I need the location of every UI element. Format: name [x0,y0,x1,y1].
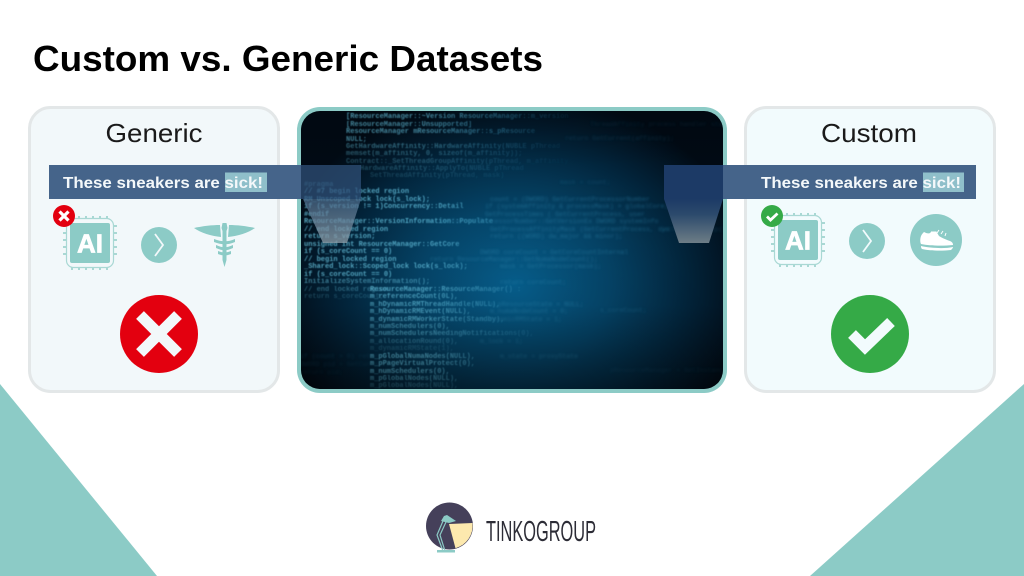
sentence text: These sneakers are sick! [63,175,263,192]
icon: green check badge [761,205,783,227]
panel: code image: m_pGlobalNodes(NULL), [370,375,458,383]
panel: code image: DWORD coreCount = GetCoreCountInternal [480,249,628,256]
panel: code image: #pragma [304,181,334,189]
panel: code image: memset(m_affinity, 0, sizeof(m_affinity)); [346,150,522,158]
panel: code image: return ResourceManager::GetNumaNodeCount(); [430,256,598,263]
panel: code image: if (s_version != 1)Concurrency::Detail [304,203,464,211]
panel: code image: m_hDynamicRMEvent(NULL), [370,308,471,316]
panel: code image: DWORD pid = GetCurrent(); [300,361,398,368]
panel: code image: m_state = proxyState [500,353,578,360]
panel: code image: // begin locked region [304,256,396,264]
panel: code image: unsigned int ResourceManager::GetCore [304,241,459,249]
panel: code image: GetProcessAffinityMask (GetCurrentProcess, sys [490,226,670,233]
panel: code image: SetThreadAffinity(pThread, mask) [370,172,504,180]
word highlight [225,172,267,192]
panel heading: Generic: Generic [106,118,202,148]
panel: code image: m_pGlobalNodes(NULL), [370,382,458,390]
panel: code image: m_allocationRound(0), [370,338,458,346]
panel: code image: // end locked region [304,286,388,294]
panel: code image: count = (DWORD) GetCurrentProcessorNumber [490,196,650,203]
panel: code image: ResourceManager mResourceManager::s_pResource [346,128,535,136]
panel: code image: m_lock = 1; [480,338,523,345]
projector beam left [303,199,361,243]
panel: code image: // #7 begin locked region [304,188,409,196]
panel: code image: GetProcessTimes ( GetCurrentProcess, user [485,211,645,218]
icon: arrow custom [849,223,885,259]
panel: code image: RM_Unscoped_lock lock(s_lock); [304,196,430,204]
panel: code image: #endif [304,211,329,219]
panel: code image: _Shared_lock::Scoped_lock lock(s_lock); [303,263,468,271]
panel: code image: m_numSchedulers(0), [370,323,450,331]
panel: code image: [ResourceManager::Unsupported] [346,121,472,129]
panel: code image: if (s_coreCount == 0) [304,271,392,279]
panel: code image [297,107,739,393]
panel: code image: return s_version; [304,233,375,241]
panel: code image: [ResourceManager::~Version ResourceManager::m_version [346,113,569,121]
panel: code image: m_dynamicRMWorkerState(Standby), [370,316,504,324]
icon: sneaker [910,214,962,266]
icon: AI chip custom: AI [785,226,811,256]
sentence bar left [49,165,361,199]
panel: code image: GetHardwareAffinity::HardwareAffinity(NUBLE pThread [346,143,560,151]
icon: arrow generic [141,227,177,263]
panel: code image: return GetCurrent(affinity); [565,135,674,142]
panel: code image: return ((WORD) dw_major && minor); [490,233,623,240]
icon: large red cross [120,295,198,373]
panel heading: Custom: Custom [821,118,917,148]
icon: AI chip generic: AI [77,228,103,258]
panel: code image: ResourceManager::ResourceManager() : [370,286,521,294]
panel: code image: m_dynamicRMState(1), [370,345,454,353]
icon: AI chip custom [771,213,825,267]
panel: code image: ResourceManager::VersionInformation::Populate [304,218,493,226]
panel: code image: HardwareAffinity::ApplyTo(NUBLE pThread [360,165,524,173]
panel: code image: m_hDynamicRMThreadHandle(NULL), [370,301,500,309]
projector beam right [664,199,723,243]
logo mark lamp [426,502,473,552]
panel: code image: GetCurrentProcessorNumber::GetVersionEx DWORD systemInfo [440,218,659,225]
panel: code image: m_pGlobalNumaNodes(NULL), [370,353,475,361]
icon: caduceus [194,223,255,267]
logo wordmark: TINKOGROUP [486,516,596,548]
sentence text: These sneakers are sick! [761,175,961,192]
word highlight [923,172,964,192]
panel: code image: pResourceManager = GetInstance(); [610,367,739,374]
panel: code image: if (systemAffinity & processMask) > globalCore; [485,203,668,210]
panel: code image: m_dynamicRMState = 1; [480,316,562,323]
panel: code image: // end locked region [304,226,388,234]
decorative corner triangle left [0,384,157,576]
logo: Tinkogroup [426,502,596,552]
panel: custom [746,108,994,392]
panel: code image: m_numSchedulersNeedingNotifications(0), [370,330,534,338]
panel: code image: s_coreCount; [600,307,647,314]
panel: generic [30,108,278,392]
decorative corner triangle right [810,384,1024,576]
panel: code image: Contract::_SetThreadGroupAffinity(pThread, m_affinity [346,158,569,166]
panel: code image: if (count > 0) return; [300,353,386,360]
panel: code image: InitializeSystemInformation(); [304,278,430,286]
title: Custom vs. Generic Datasets [33,38,543,79]
panel: code image: return pid; [300,369,343,376]
sentence bar right [664,165,976,199]
panel: code image: ThreadAffinity process handler state [590,121,731,128]
panel: code image: mask = GetProcessor(mask); [500,263,601,270]
panel: code image: SetCurrentGroup(); [660,226,730,233]
panel: code image: NULL; [346,136,367,144]
panel: code image: if (s_coreCount == 0) [304,248,392,256]
panel: code image: m_numSchedulers(0), [370,368,450,376]
panel: code image: return coreCount; [500,279,566,286]
panel: code image: m_referenceCount(0L), [370,293,458,301]
icon: AI chip generic [63,216,117,270]
panel: code image: mask = count; [560,179,611,186]
panel: code image: m_pResourceState = NULL; [490,301,584,308]
panel: code image: return s_coreCount; [304,293,384,301]
icon: large green check [831,295,909,373]
icon: red cross badge [53,205,75,227]
panel: code image: m_numaNodeCount = 0; [490,308,568,315]
panel: code image: m_pPageVirtualProtect(0), [370,360,475,368]
